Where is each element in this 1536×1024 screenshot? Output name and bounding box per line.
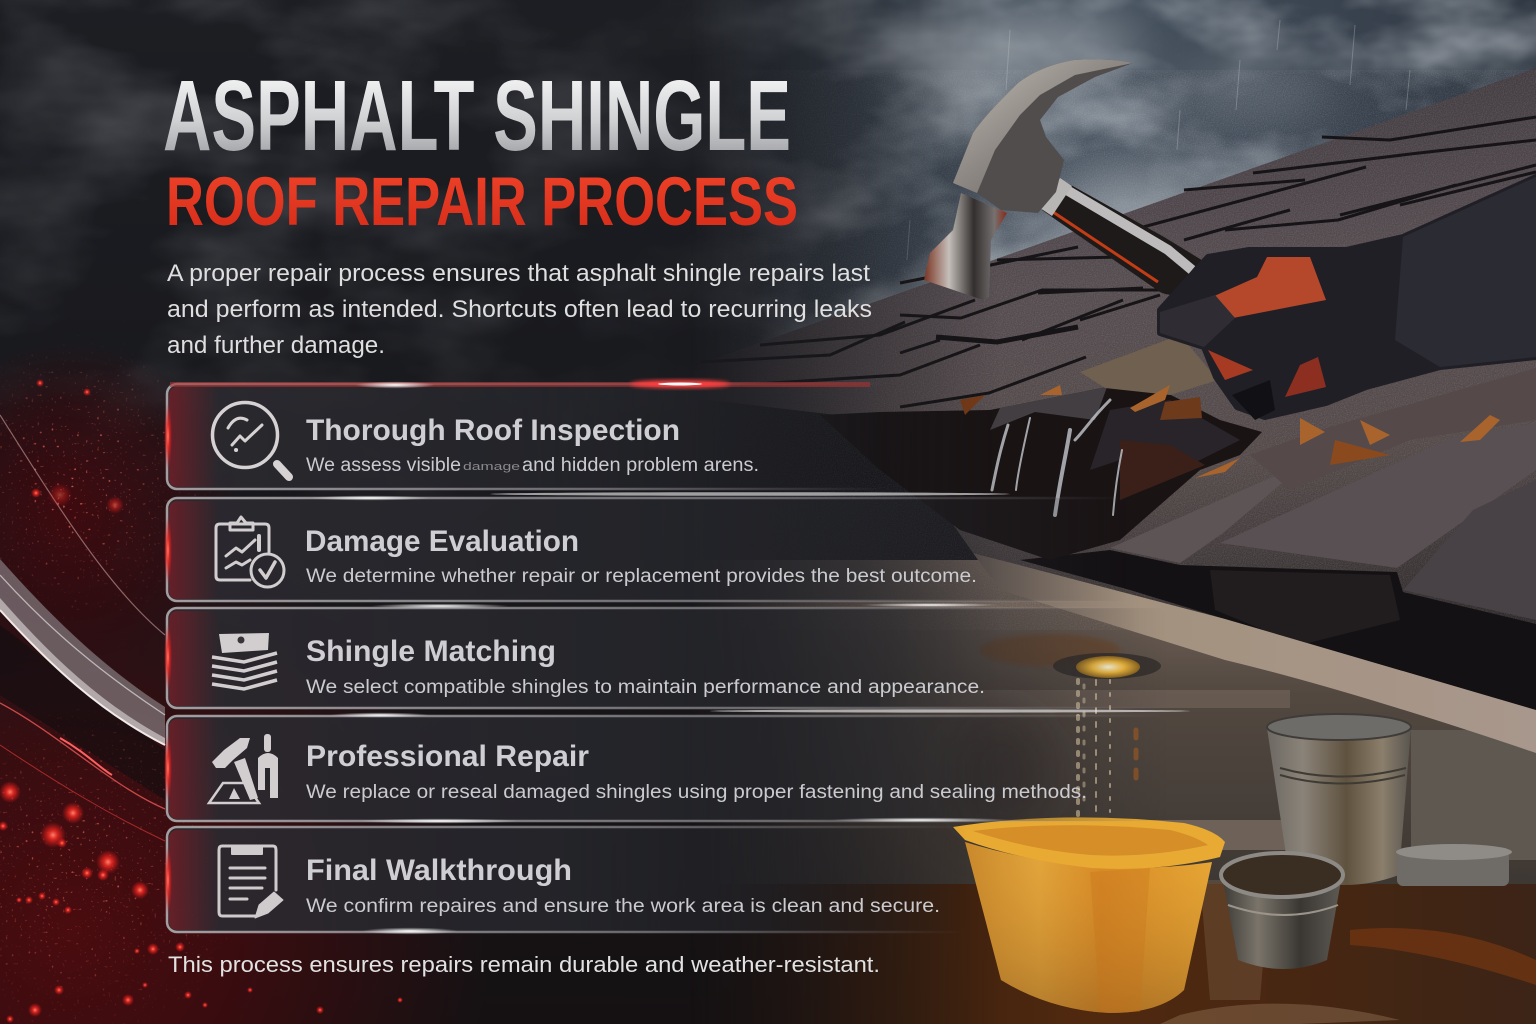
intro paragraph bbox=[167, 260, 872, 359]
description: and hidden problem arens. bbox=[522, 455, 759, 476]
gutter bbox=[973, 553, 1536, 753]
ceiling light leak and drips bbox=[1053, 653, 1161, 815]
sparks bbox=[0, 379, 403, 1023]
wall bbox=[720, 560, 1536, 884]
head and claw bbox=[953, 59, 1133, 213]
title bbox=[163, 60, 798, 240]
small tin bucket bbox=[1221, 853, 1343, 969]
flat tin bbox=[1396, 844, 1512, 886]
sky and clouds bbox=[714, 0, 1536, 348]
description: We select compatible shingles to maintain performance and appearance. bbox=[306, 677, 985, 698]
heading: Thorough Roof Inspection bbox=[306, 414, 680, 447]
damaged hole and water bbox=[820, 335, 1500, 560]
yellow bucket bbox=[953, 817, 1225, 1013]
heading: Shingle Matching bbox=[306, 635, 556, 668]
heading: Damage Evaluation bbox=[305, 525, 579, 558]
intro paragraph: and further damage. bbox=[167, 332, 385, 359]
step 1: thorough roof inspection bbox=[164, 380, 1010, 496]
description: We determine whether repair or replacement provides the best outcome. bbox=[306, 566, 977, 587]
icon: hammer and worker bbox=[209, 734, 278, 803]
step 4: professional repair bbox=[164, 712, 1167, 824]
swoosh light streaks bbox=[0, 415, 165, 841]
icon: shingle stack bbox=[212, 633, 277, 689]
description: damage bbox=[463, 461, 520, 473]
step 5: final walkthrough bbox=[164, 827, 967, 934]
intro paragraph: and perform as intended. Shortcuts often lead to recurring leaks bbox=[167, 296, 872, 323]
floor bbox=[786, 880, 1536, 1024]
heading: Professional Repair bbox=[306, 740, 589, 773]
step 3: shingle matching bbox=[164, 603, 1190, 713]
hammer bbox=[924, 59, 1218, 300]
closing statement: This process ensures repairs remain durable and weather-resistant. bbox=[168, 952, 880, 977]
icon: checklist and pencil bbox=[219, 846, 283, 918]
poll bbox=[924, 193, 1007, 300]
background bbox=[0, 0, 759, 1024]
intro paragraph: A proper repair process ensures that asphalt shingle repairs last bbox=[167, 260, 870, 287]
description bbox=[306, 455, 759, 476]
heading: Final Walkthrough bbox=[306, 854, 572, 887]
description: We assess visible bbox=[306, 455, 461, 476]
scene behind panels bbox=[640, 0, 1536, 1024]
gloved hand bbox=[1160, 177, 1536, 420]
description: We confirm repaires and ensure the work area is clean and secure. bbox=[306, 896, 940, 917]
step 2: damage evaluation bbox=[164, 496, 1127, 601]
title line 1: ASPHALT SHINGLE bbox=[163, 60, 791, 172]
big tin bucket bbox=[1267, 714, 1411, 885]
hammer handle bbox=[1040, 178, 1218, 295]
description: We replace or reseal damaged shingles using proper fastening and sealing methods. bbox=[306, 782, 1087, 803]
icon: clipboard with check bbox=[216, 517, 284, 587]
title line 2: ROOF REPAIR PROCESS bbox=[166, 163, 798, 240]
roof bbox=[640, 68, 1536, 710]
icon: magnifying glass bbox=[212, 402, 289, 477]
lower shingles bbox=[1020, 368, 1536, 710]
